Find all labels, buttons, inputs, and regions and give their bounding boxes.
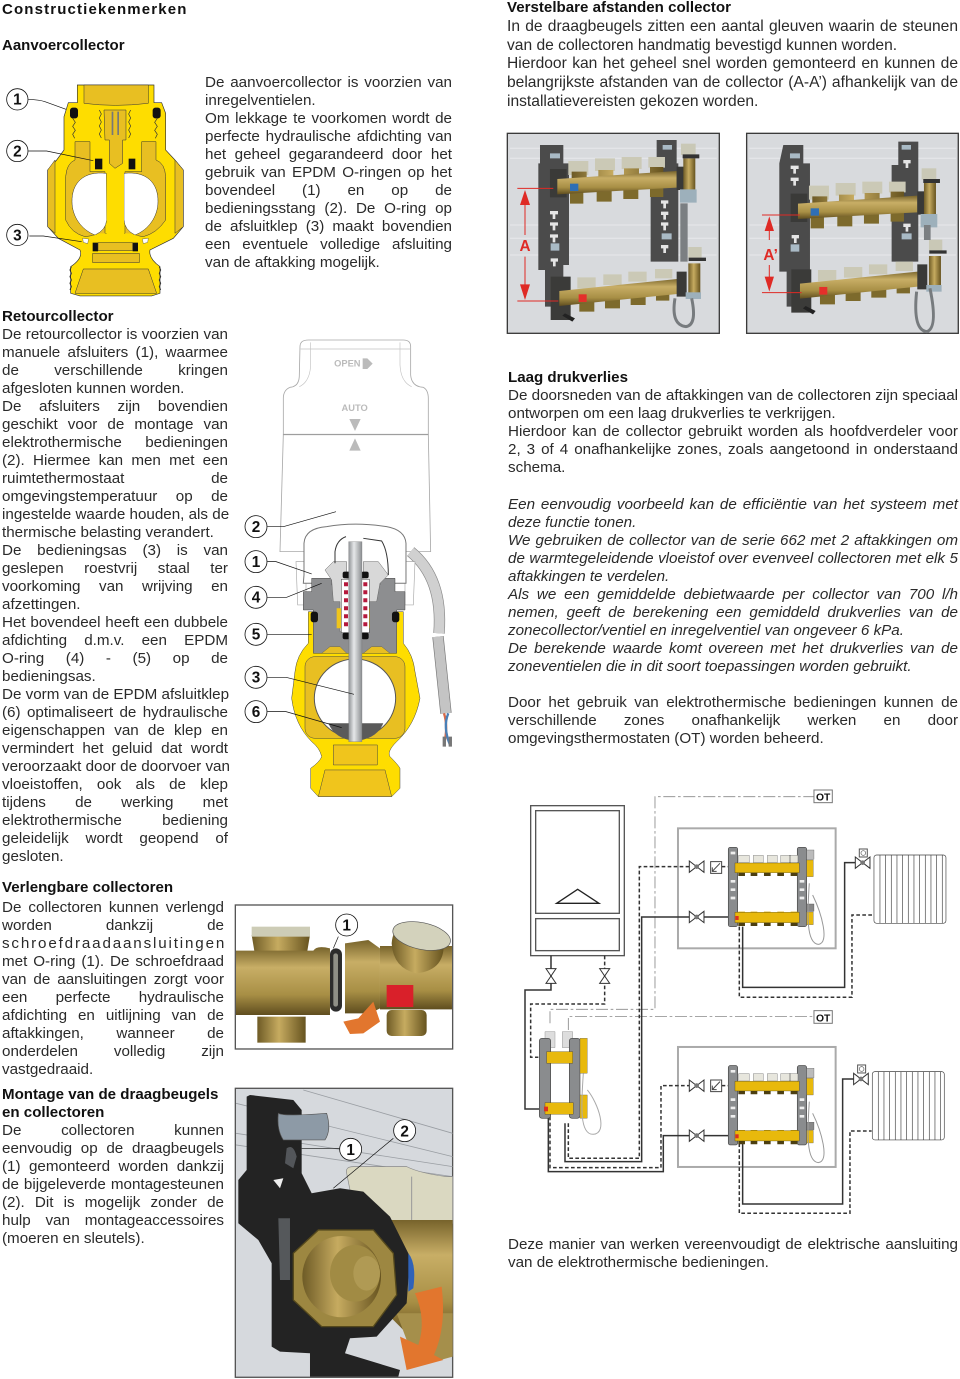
text: retourcollector: afzettingen.: [2, 596, 81, 613]
radiator 2: [872, 1072, 944, 1140]
text: aanvoercollector: perfecte hydraulische afdichting van: [205, 128, 452, 145]
text: retourcollector: veroorzaakt door de doorvoer van: [2, 758, 230, 775]
text: voorbeeld (italic): zonecollector/ventiel en inregelventiel van ongeveer 6 kPa.: [508, 622, 904, 639]
text: aanvoercollector: van de aftakking mogelijk.: [205, 254, 380, 271]
text: montage van de draagbeugels: [2, 1086, 224, 1247]
text: retourcollector: geslepen roestvrij staal ter: [2, 560, 228, 577]
text: retourcollector: de verschillende kringen: [2, 362, 228, 379]
text: verlengbare collectoren: afdichting en uitlijning van de: [2, 1007, 224, 1024]
text: montage van de draagbeugels: (1) gemonteerd worden dankzij: [2, 1158, 224, 1175]
text: voorbeeld (italic): Als we een gemiddelde debietwaarde per collector van 700 l/h: [508, 586, 958, 603]
text: verstelbare afstanden collector: belangrijkste afstanden van de collector (A-A’) afhankelijk van de: [507, 74, 958, 91]
text: retourcollector: Retourcollector: [2, 308, 114, 325]
yellow valve body: [292, 612, 420, 797]
text: retourcollector: Het bovendeel heeft een dubbele: [2, 614, 228, 631]
text: laag drukverlies: ontworpen om een laag drukverlies te verkrijgen.: [508, 405, 836, 422]
text: montage van de draagbeugels: (2). Dit is mogelijk zonder de: [2, 1194, 224, 1211]
title: Constructiekenmerken: [2, 1, 188, 18]
cable: [411, 552, 439, 633]
text: verstelbare afstanden collector: van de collectoren handmatig bevestigd kunnen worden.: [507, 37, 897, 54]
text: voorbeeld (italic): [507, 496, 958, 675]
text: aanvoercollector: een eventuele volledige afsluiting: [205, 236, 452, 253]
text: retourcollector: voorkoming van wrijving en: [2, 578, 228, 595]
text: aanvoercollector: de afsluitklep (3) maakt bovendien: [205, 218, 452, 235]
text: elektrothermische bedieningen: verschillende zones onafhankelijk werken en door: [508, 712, 958, 729]
boiler: [531, 806, 624, 956]
text: laag drukverlies: Laag drukverlies: [508, 369, 628, 386]
text: verlengbare collectoren: worden dankzij de: [2, 917, 224, 934]
grey nut and spring housing: [303, 578, 405, 653]
text: montage van de draagbeugels: De collectoren kunnen: [2, 1122, 224, 1139]
diagram: zone heating schematic: [525, 790, 946, 1213]
text: voorbeeld (italic): aftakkingen te verdelen.: [508, 568, 669, 585]
text: elektrothermische bedieningen: [508, 694, 958, 747]
text: retourcollector: omgevingstemperatuur op de: [2, 488, 228, 505]
text: laag drukverlies: schema.: [508, 459, 565, 476]
text: laag drukverlies: [508, 369, 958, 476]
text: retourcollector: (6) optimaliseert de hydraulische: [2, 704, 228, 721]
text: retourcollector: elektrothermische bedieningen: [2, 434, 228, 451]
thermostat box 2: OT: [816, 1013, 831, 1024]
diagram: retourcollector with thermal actuator: 4: [252, 590, 261, 607]
text: verlengbare collectoren: schroefdraadaansluitingen: [2, 935, 226, 952]
text: aanvoercollector: het geheel gegarandeerd door het: [205, 146, 452, 163]
text: verlengbare collectoren: [2, 879, 226, 1078]
text: aanvoercollector: bovendeel (1) en op de: [205, 182, 452, 199]
text: voorbeeld (italic): de warmtegeleidende vloeistof over evenveel collectoren met elk 5: [508, 550, 958, 567]
text: elektrothermische bedieningen: Door het gebruik van elektrothermische bedieningen kunnen de: [508, 694, 958, 711]
text: elektrische aansluiting: van de elektrothermische bedieningen.: [508, 1254, 769, 1271]
text: verlengbare collectoren: onderdelen volledig zijn: [2, 1043, 224, 1060]
diagram: retourcollector with thermal actuator: [245, 340, 452, 797]
text: retourcollector: vermindert het geluid dat wordt: [2, 740, 228, 757]
text: montage van de draagbeugels: en collectoren: [2, 1104, 104, 1121]
text: verstelbare afstanden collector: [507, 0, 958, 110]
text: retourcollector: afgesloten kunnen worden.: [2, 380, 184, 397]
heading: Aanvoercollector: Aanvoercollector: [2, 37, 125, 54]
text: elektrothermische bedieningen: omgevingsthermostaten (OT) worden beheerd.: [508, 730, 824, 747]
text: aanvoercollector: inregelventielen.: [205, 92, 316, 109]
text: retourcollector: De retourcollector is voorzien van: [2, 326, 228, 343]
diagram: aanvoercollector valve: 2: [13, 143, 22, 160]
text: verlengbare collectoren: Verlengbare collectoren: [2, 879, 173, 896]
photo: adjustable distance A': [747, 133, 958, 333]
text: voorbeeld (italic): De berekende waarde komt overeen met het drukverlies van de: [508, 640, 958, 657]
pipes: [525, 863, 873, 1213]
text: montage van de draagbeugels: de bijgeleverde montagesteunen: [2, 1176, 224, 1193]
photo: threaded manifold connection: 1: [342, 918, 351, 935]
valves: [546, 849, 870, 1141]
text: retourcollector: [2, 308, 230, 865]
text: aanvoercollector: Om lekkage te voorkomen wordt de: [205, 110, 452, 127]
text: retourcollector: vloeistoffen, ook als de klep: [2, 776, 228, 793]
text: retourcollector: geschikt voor de montage van: [2, 416, 228, 433]
text: retourcollector: tijdens de werking met: [2, 794, 228, 811]
control wiring: [550, 797, 814, 1030]
text: retourcollector: De vorm van de EPDM afsluitklep: [2, 686, 229, 703]
photo: threaded manifold connection: [235, 905, 453, 1049]
diagram: retourcollector with thermal actuator: 6: [252, 704, 260, 721]
photo: mounting on bracket: [235, 1088, 453, 1377]
text: verlengbare collectoren: met O-ring (1). De schroefdraad: [2, 953, 224, 970]
manifolds: [728, 847, 824, 1163]
text: verlengbare collectoren: aftakkingen, wanneer de: [2, 1025, 224, 1042]
text: retourcollector: eigenschappen van de klep en: [2, 722, 228, 739]
primary manifold: [539, 1032, 601, 1134]
actuator housing: [283, 340, 428, 434]
text: montage van de draagbeugels: eenvoudig op de draagbeugels: [2, 1140, 224, 1157]
text: voorbeeld (italic): zoneventielen die in dit soort toepassingen worden gebruikt.: [508, 658, 912, 675]
zone cabinets: [678, 828, 836, 1167]
leader lines and numbers: [267, 512, 354, 728]
diagram: retourcollector with thermal actuator: 5: [252, 627, 261, 644]
text: retourcollector: bedieningsas.: [2, 668, 96, 685]
text: retourcollector: ruimtethermostaat de: [2, 470, 228, 487]
radiator: [874, 855, 946, 923]
photo: adjustable distance A': A’: [763, 247, 778, 264]
text: voorbeeld (italic): deze functie tonen.: [508, 514, 636, 531]
diagram: aanvoercollector valve: 1: [13, 92, 22, 109]
text: verlengbare collectoren: een perfecte hydraulische: [2, 989, 224, 1006]
photo: mounting on bracket: 1: [346, 1142, 355, 1159]
photo: mounting on bracket: 2: [400, 1123, 409, 1140]
text: retourcollector: manuele afsluiters (1), waarmee: [2, 344, 228, 361]
text: retourcollector: gesloten.: [2, 848, 64, 865]
white cap: [303, 524, 406, 583]
text: montage van de draagbeugels: (moeren en sleutels).: [2, 1230, 145, 1247]
text: retourcollector: De afsluiters zijn bovendien: [2, 398, 228, 415]
text: verstelbare afstanden collector: installatievereisten gekozen worden.: [507, 93, 758, 110]
diagram: aanvoercollector valve: [7, 85, 183, 296]
text: voorbeeld (italic): Een eenvoudig voorbeeld kan de efficiëntie van het systeem met: [508, 496, 958, 513]
text: montage van de draagbeugels: Montage van de draagbeugels: [2, 1086, 218, 1103]
text: aanvoercollector: bedieningsstang (2). De O-ring op: [205, 200, 452, 217]
text: verlengbare collectoren: vastgedraaid.: [2, 1061, 93, 1078]
text: aanvoercollector: gebruik van EPDM O-ringen op het: [205, 164, 452, 181]
text: retourcollector: thermische belasting verandert.: [2, 524, 214, 541]
text: retourcollector: geleidelijk wordt geopend of: [2, 830, 228, 847]
diagram: retourcollector with thermal actuator: 1: [252, 554, 261, 571]
text: laag drukverlies: De doorsneden van de aftakkingen van de collectoren zijn speciaal: [508, 387, 958, 404]
text: voorbeeld (italic): nemen, geeft de berekening een gemiddeld drukverlies van de: [508, 604, 958, 621]
text: laag drukverlies: 2, 3 of 4 onafhankelijke zones, zoals aangetoond in onderstaand: [508, 441, 958, 458]
text: elektrische aansluiting: Deze manier van werken vereenvoudigt de elektrische aansluiting: [508, 1236, 958, 1253]
diagram: aanvoercollector valve: 3: [13, 227, 22, 244]
diagram: retourcollector with thermal actuator: OPEN: [334, 359, 361, 369]
text: aanvoercollector: De aanvoercollector is voorzien van: [205, 74, 452, 91]
text: verstelbare afstanden collector: In de draagbeugels zitten een aantal gleuven waarin de steunen: [507, 18, 958, 35]
diagram: retourcollector with thermal actuator: AUTO: [342, 403, 368, 413]
text: verstelbare afstanden collector: Hierdoor kan het geheel snel worden gemonteerd en kunnen de: [507, 55, 958, 72]
text: verlengbare collectoren: van de aansluitingen zorgt voor: [2, 971, 224, 988]
text: montage van de draagbeugels: hulp van montageaccessoires: [2, 1212, 224, 1229]
text: retourcollector: De bedieningsas (3) is van: [2, 542, 228, 559]
text: laag drukverlies: Hierdoor kan de collector gebruikt worden als hoofdverdeler voor: [508, 423, 958, 440]
diagram: retourcollector with thermal actuator: 2: [252, 519, 260, 536]
text: retourcollector: elektrothermische bediening: [2, 812, 228, 829]
thermostat box 2: [814, 1011, 832, 1024]
text: aanvoercollector: [205, 74, 452, 271]
text: voorbeeld (italic): We gebruiken de collector van de serie 662 met 2 aftakkingen om: [508, 532, 958, 549]
text: retourcollector: afdichting d.m.v. een EPDM: [2, 632, 228, 649]
text: verlengbare collectoren: De collectoren kunnen verlengd: [2, 899, 224, 916]
photo: adjustable distance A: [507, 133, 719, 333]
diagram: retourcollector with thermal actuator: 3: [252, 670, 260, 687]
text: elektrische aansluiting: [508, 1236, 958, 1271]
photo: adjustable distance A: A: [519, 238, 531, 255]
thermostat boxes: [814, 790, 832, 804]
text: retourcollector: ingestelde waarde houden, als de: [2, 506, 229, 523]
text: retourcollector: (2). Hiermee kan men met een: [2, 452, 228, 469]
thermostat boxes: OT: [816, 793, 831, 804]
text: retourcollector: O-ring (4) - (5) op de: [2, 650, 228, 667]
